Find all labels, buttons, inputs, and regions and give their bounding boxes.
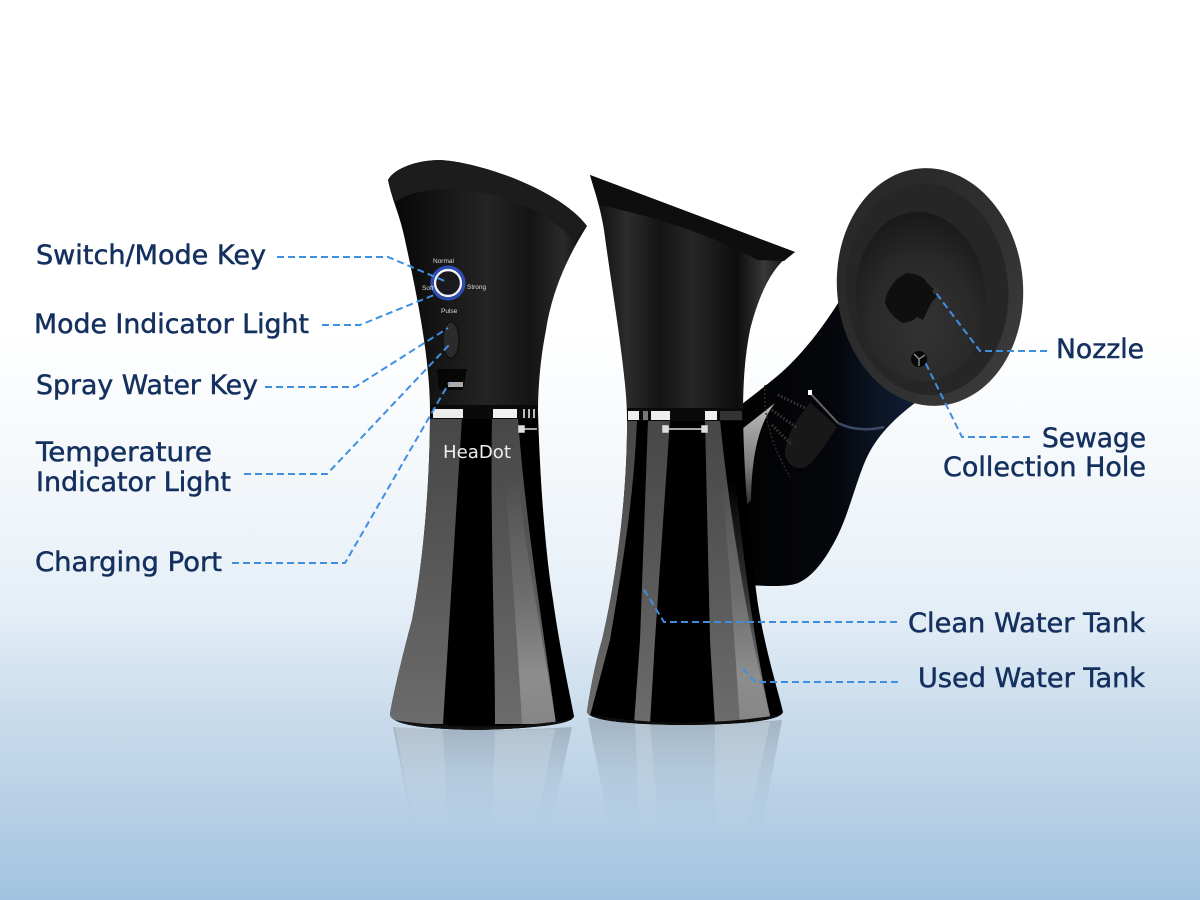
label: temperature indicator light: Temperature xyxy=(35,437,212,468)
switch mode key: Strong xyxy=(467,284,487,291)
label: sewage collection hole: Collection Hole xyxy=(943,452,1146,483)
label: temperature indicator light: Indicator Light xyxy=(36,467,231,498)
leader line: charging port xyxy=(232,383,449,563)
nozzle xyxy=(885,273,940,323)
leader line: clean water tank xyxy=(643,588,897,622)
rim xyxy=(590,175,795,261)
label: sewage collection hole xyxy=(943,423,1146,483)
label: mode indicator light: Mode Indicator Light xyxy=(34,309,309,340)
sewage collection hole xyxy=(911,351,927,367)
label: sewage collection hole: Sewage xyxy=(1042,423,1146,454)
leader line: temperature indicator light xyxy=(244,345,449,474)
neck ring xyxy=(810,393,838,423)
label: clean water tank: Clean Water Tank xyxy=(908,608,1145,639)
neck xyxy=(742,300,915,586)
label: spray water key: Spray Water Key xyxy=(36,370,258,401)
switch mode key: Pulse xyxy=(441,308,458,315)
reflection: middle device xyxy=(588,718,782,840)
upper body xyxy=(590,175,795,415)
lower glossy body xyxy=(390,412,574,730)
brand text: HeaDot xyxy=(443,443,511,463)
spray water key xyxy=(443,322,459,358)
leader line: mode indicator light xyxy=(322,295,434,325)
rim xyxy=(388,160,587,242)
upper body xyxy=(388,160,587,412)
leader line: sewage hole xyxy=(925,362,1030,437)
switch mode key: Normal xyxy=(433,258,455,265)
label: used water tank: Used Water Tank xyxy=(918,663,1145,694)
label: charging port: Charging Port xyxy=(35,547,222,578)
leader line: switch/mode key xyxy=(277,257,447,282)
charging port xyxy=(437,369,467,390)
lock symbols xyxy=(663,426,707,432)
dark control panel xyxy=(785,403,837,468)
white marker xyxy=(808,390,812,395)
leader line: spray water key xyxy=(265,328,448,387)
collar ring xyxy=(430,405,538,419)
switch mode key: Soft xyxy=(422,285,434,292)
device: middle side view xyxy=(580,175,795,732)
device: left front view xyxy=(380,160,590,735)
collar ring xyxy=(627,408,743,421)
lower glossy body xyxy=(587,421,783,725)
label: temperature indicator light xyxy=(35,437,231,498)
sliver highlight xyxy=(742,403,775,510)
head xyxy=(827,160,1033,414)
label: switch/mode key: Switch/Mode Key xyxy=(36,240,266,271)
leader line: used water tank xyxy=(740,665,898,682)
switch mode key xyxy=(422,258,487,315)
leader line: nozzle xyxy=(936,293,1047,351)
lock icon xyxy=(519,426,537,432)
device: rear view with head xyxy=(742,160,1033,586)
label: nozzle: Nozzle xyxy=(1056,334,1144,365)
reflection: left device xyxy=(393,727,572,830)
